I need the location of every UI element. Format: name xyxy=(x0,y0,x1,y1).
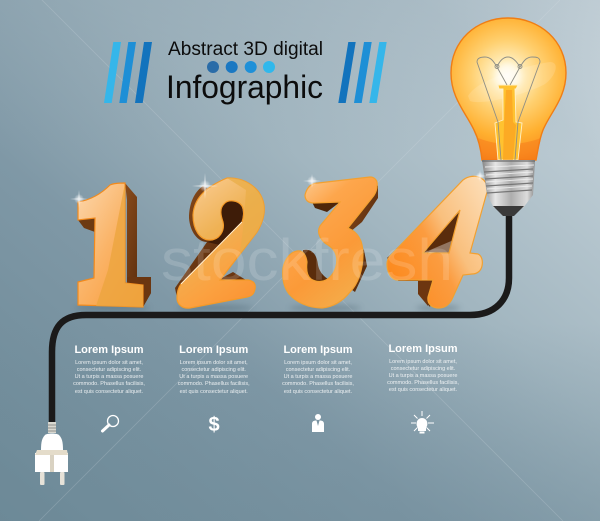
watermark: stockfresh xyxy=(161,228,453,293)
column 3 text: commodo. Phasellus facilisis, xyxy=(282,381,354,387)
column 2 text: Lorem Ipsum xyxy=(179,344,248,356)
icon: person xyxy=(312,414,324,432)
column 4 text xyxy=(387,343,459,393)
bulb neck tint xyxy=(478,138,541,160)
column 2 text: Lorem ipsum dolor sit amet, xyxy=(180,360,248,366)
icon: dollar: $ xyxy=(208,414,220,436)
column 2 text: consectetur adipiscing elit. xyxy=(181,367,246,373)
plug xyxy=(35,422,68,485)
column 1 text: Ut a turpis a massa posuere xyxy=(75,374,143,380)
digit 1 xyxy=(78,183,151,307)
plug strain relief xyxy=(48,422,56,433)
plug band xyxy=(35,450,68,455)
filament glow xyxy=(495,63,521,89)
sparkles xyxy=(70,170,487,208)
right stripes xyxy=(338,42,387,103)
filament xyxy=(477,57,540,160)
title: line two: Infographic xyxy=(166,69,323,105)
column 1 text: Lorem Ipsum xyxy=(74,344,144,356)
column 2 text: est quis consectetur aliquet. xyxy=(180,389,248,395)
bulb gloss xyxy=(468,62,556,102)
column 3 text: est quis consectetur aliquet. xyxy=(284,389,353,395)
column 3 text: consectetur adipiscing elit. xyxy=(286,367,351,373)
column 1 text: consectetur adipiscing elit. xyxy=(77,367,142,373)
column 2 text: Ut a turpis a massa posuere xyxy=(179,374,248,380)
screw base xyxy=(482,160,535,216)
column 4 text: consectetur adipiscing elit. xyxy=(391,366,456,372)
light bulb xyxy=(451,18,566,216)
icon: idea bulb xyxy=(411,411,434,434)
column 4 text: Lorem ipsum dolor sit amet, xyxy=(389,359,457,365)
glass stem xyxy=(495,85,522,160)
digit 4 xyxy=(387,176,487,308)
column 3 text: Ut a turpis a massa posuere xyxy=(284,374,352,380)
digit 2 xyxy=(175,178,264,308)
left stripes xyxy=(104,42,152,103)
column 3 text xyxy=(282,344,354,395)
plug pins xyxy=(40,472,44,485)
column 2 text: commodo. Phasellus facilisis, xyxy=(178,381,250,387)
digit 3 xyxy=(283,177,378,308)
column 4 text: Ut a turpis a massa posuere xyxy=(389,373,457,379)
column 4 text: commodo. Phasellus facilisis, xyxy=(387,380,459,386)
column 3 text: Lorem ipsum dolor sit amet, xyxy=(284,360,352,366)
power cable xyxy=(47,212,509,425)
column 1 text: Lorem ipsum dolor sit amet, xyxy=(75,360,143,366)
title dots xyxy=(207,61,275,73)
column 1 text: est quis consectetur aliquet. xyxy=(75,389,144,395)
column 1 text: commodo. Phasellus facilisis, xyxy=(73,381,145,387)
bulb glass xyxy=(451,18,566,160)
column 2 text xyxy=(178,344,250,395)
column 4 text: Lorem Ipsum xyxy=(388,343,458,355)
column 1 text xyxy=(73,344,145,395)
digit shadows xyxy=(74,305,460,311)
icon: magnifier xyxy=(102,416,118,431)
title: line one: Abstract 3D digital xyxy=(168,39,323,60)
column 3 text: Lorem Ipsum xyxy=(283,344,353,356)
column 4 text: est quis consectetur aliquet. xyxy=(389,387,458,393)
plug head xyxy=(35,434,68,472)
